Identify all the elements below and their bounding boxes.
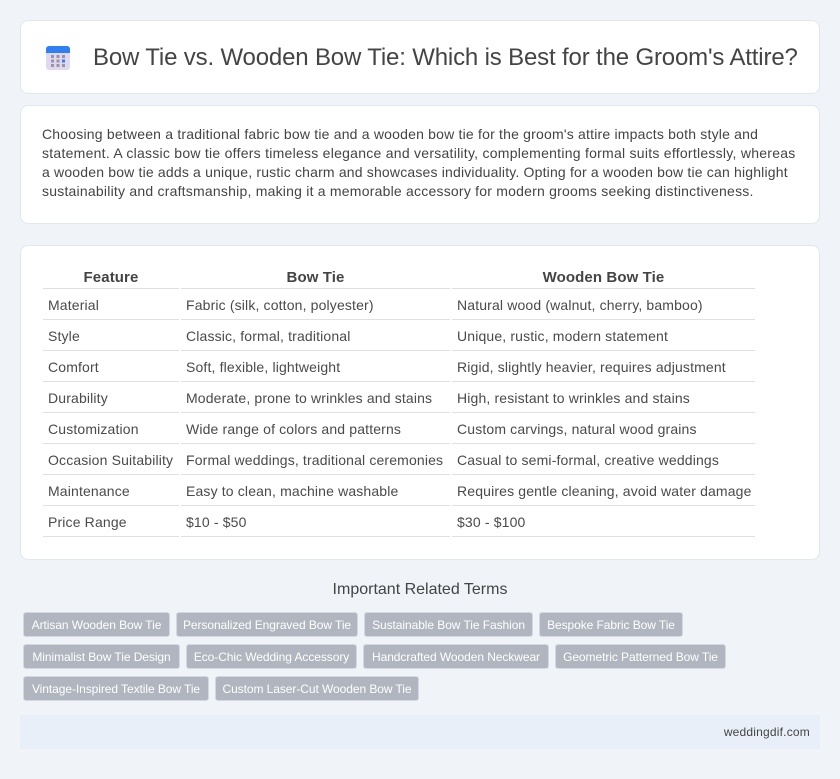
comparison table: Style [48, 328, 80, 344]
comparison table: Classic, formal, traditional [186, 328, 350, 344]
comparison table: Comfort [48, 359, 99, 375]
comparison table: Soft, flexible, lightweight [186, 359, 340, 375]
tag list: Personalized Engraved Bow Tie [183, 618, 351, 632]
comparison table: Maintenance [48, 483, 130, 499]
heading: important related terms: Important Related Terms [333, 581, 507, 598]
title: Bow Tie vs. Wooden Bow Tie: Which is Best for the Groom's Attire? [93, 44, 798, 71]
comparison table: Formal weddings, traditional ceremonies [186, 452, 443, 468]
tag list: Vintage-Inspired Textile Bow Tie [32, 682, 200, 696]
comparison table: Rigid, slightly heavier, requires adjustment [457, 359, 726, 375]
tag list: Minimalist Bow Tie Design [32, 650, 171, 664]
panel: introduction [20, 105, 820, 224]
comparison table: Occasion Suitability [48, 452, 173, 468]
comparison table: Price Range [48, 514, 127, 530]
tag list: Handcrafted Wooden Neckwear [372, 650, 540, 664]
intro paragraph: sustainability and craftsmanship, making it a memorable accessory for modern grooms seeking distinctiveness. [42, 183, 754, 199]
comparison table: Custom carvings, natural wood grains [457, 421, 697, 437]
panel: comparison table [20, 245, 820, 560]
intro paragraph [42, 126, 796, 199]
comparison table: Durability [48, 390, 108, 406]
comparison table: Fabric (silk, cotton, polyester) [186, 297, 374, 313]
comparison table: Customization [48, 421, 139, 437]
icon: calendar [46, 46, 70, 70]
comparison table [43, 269, 755, 537]
comparison table: $30 - $100 [457, 514, 525, 530]
footer bar [20, 715, 820, 749]
tag list: Eco-Chic Wedding Accessory [194, 650, 349, 664]
tag list: Bespoke Fabric Bow Tie [547, 618, 675, 632]
tag list: Artisan Wooden Bow Tie [32, 618, 161, 632]
tag list: Geometric Patterned Bow Tie [563, 650, 718, 664]
comparison table: Feature [84, 269, 138, 286]
comparison table: Wide range of colors and patterns [186, 421, 401, 437]
comparison table: Wooden Bow Tie [543, 269, 664, 286]
comparison table: Bow Tie [287, 269, 344, 286]
comparison table: Material [48, 297, 99, 313]
comparison table: Unique, rustic, modern statement [457, 328, 668, 344]
tag list [23, 612, 726, 701]
comparison table: Moderate, prone to wrinkles and stains [186, 390, 432, 406]
footer source text: weddingdif.com [724, 725, 810, 739]
comparison table: Casual to semi-formal, creative weddings [457, 452, 719, 468]
tag list: Sustainable Bow Tie Fashion [372, 618, 525, 632]
comparison table: Easy to clean, machine washable [186, 483, 398, 499]
panel: title card [20, 20, 820, 94]
comparison table: $10 - $50 [186, 514, 247, 530]
comparison table: High, resistant to wrinkles and stains [457, 390, 690, 406]
comparison table: Natural wood (walnut, cherry, bamboo) [457, 297, 703, 313]
intro paragraph: a wooden bow tie adds a unique, rustic charm and showcases individuality. Opting for a wooden bow tie can highlight [42, 164, 788, 180]
tag list: Custom Laser-Cut Wooden Bow Tie [222, 682, 412, 696]
intro paragraph: Choosing between a traditional fabric bow tie and a wooden bow tie for the groom's attire impacts both style and [42, 126, 758, 142]
intro paragraph: statement. A classic bow tie offers timeless elegance and versatility, complementing formal suits effortlessly, whereas [42, 145, 796, 161]
comparison table: Requires gentle cleaning, avoid water damage [457, 483, 752, 499]
